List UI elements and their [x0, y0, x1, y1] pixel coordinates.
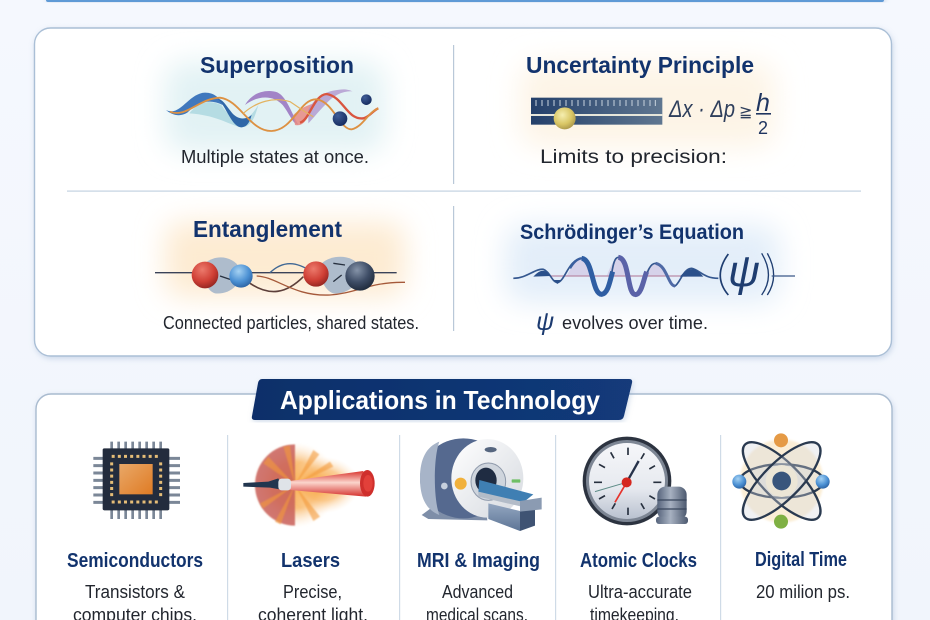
- applications banner: [252, 379, 632, 420]
- psi symbol: ψ: [728, 247, 760, 296]
- uncertainty formula: 2: [758, 118, 768, 138]
- top banner edge: [46, 0, 884, 2]
- mri caption: [426, 582, 528, 620]
- schrodinger heading: Schrödinger’s Equation: [520, 221, 744, 244]
- entanglement glow: [165, 222, 405, 297]
- entanglement caption: Connected particles, shared states.: [163, 313, 419, 333]
- uncertainty formula: Δx · Δp: [668, 96, 735, 123]
- concept: uncertainty principle: [520, 52, 775, 168]
- semiconductors caption: [73, 582, 197, 620]
- superposition glow: [165, 62, 385, 152]
- ruler slider icon: [531, 98, 662, 129]
- atom icon: [732, 432, 831, 530]
- uncertainty caption: Limits to precision:: [540, 146, 727, 168]
- application: semiconductors: [67, 442, 203, 620]
- entanglement heading: Entanglement: [193, 216, 342, 242]
- schrodinger caption: [536, 308, 708, 336]
- atomic clock icon: [583, 437, 688, 525]
- uncertainty heading: Uncertainty Principle: [526, 52, 754, 78]
- digital time caption: 20 milion ps.: [756, 582, 850, 602]
- superposition caption: Multiple states at once.: [181, 147, 369, 167]
- concept: schrodinger's equation: [505, 221, 795, 336]
- mri heading: MRI & Imaging: [417, 550, 540, 572]
- application: lasers: [243, 442, 375, 620]
- mri scanner icon: [420, 438, 542, 531]
- panel: quantum concepts: [34, 28, 892, 356]
- lasers caption: [258, 582, 368, 620]
- applications banner: Applications in Technology: [280, 385, 601, 415]
- uncertainty glow: [520, 62, 775, 147]
- atomic clocks caption: [588, 582, 692, 620]
- concepts card: [34, 28, 892, 356]
- concept: entanglement: [155, 216, 419, 333]
- panel: applications in technology: [36, 379, 892, 620]
- schrodinger caption: evolves over time.: [562, 313, 708, 333]
- concept: superposition: [165, 52, 385, 167]
- superposition heading: Superposition: [200, 52, 354, 78]
- laser icon: [243, 442, 375, 528]
- chip icon: [93, 442, 180, 519]
- wavefunction icon: [513, 253, 795, 295]
- lasers heading: Lasers: [281, 550, 340, 572]
- uncertainty formula: [668, 89, 771, 138]
- semiconductors caption: Transistors &: [85, 582, 185, 602]
- atomic clocks caption: Ultra-accurate: [588, 582, 692, 602]
- application: digital time: [732, 432, 850, 602]
- uncertainty formula: h: [756, 89, 770, 117]
- schrodinger glow: [505, 225, 780, 303]
- semiconductors heading: Semiconductors: [67, 550, 203, 572]
- atomic clocks heading: Atomic Clocks: [580, 550, 697, 572]
- digital time heading: Digital Time: [755, 549, 847, 571]
- schrodinger caption: ψ: [536, 308, 554, 336]
- application: atomic clocks: [580, 437, 697, 620]
- lasers caption: Precise,: [283, 582, 342, 602]
- superposition wave icon: [166, 89, 378, 131]
- applications card: [36, 394, 892, 620]
- entangled particles icon: [155, 257, 405, 295]
- application: mri and imaging: [417, 438, 542, 620]
- uncertainty formula: ≧: [739, 104, 752, 121]
- mri caption: Advanced: [442, 582, 513, 602]
